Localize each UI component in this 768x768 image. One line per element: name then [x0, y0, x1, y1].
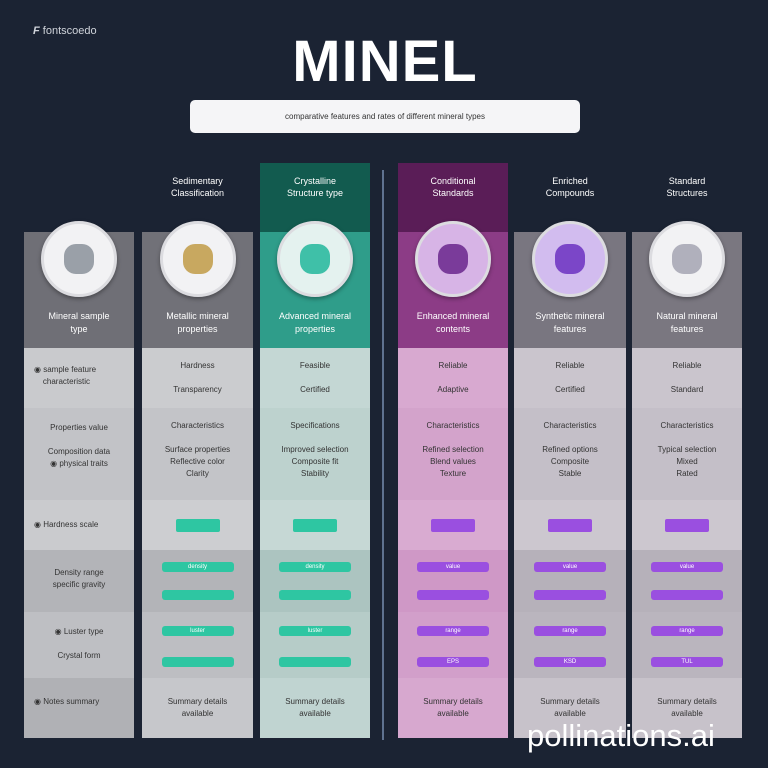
column 3: Summary details — [285, 697, 345, 706]
column 6: Natural mineral — [656, 311, 718, 321]
column 3: Feasible — [300, 361, 330, 370]
column 1: ◉ Hardness scale — [34, 520, 98, 529]
column 6: Rated — [676, 469, 698, 478]
column 2: luster — [190, 628, 205, 634]
column 6: Standard — [669, 176, 705, 186]
column 1 — [24, 221, 134, 738]
column 6: Mixed — [676, 457, 698, 466]
column 4: value — [446, 564, 460, 570]
column 6: TUL — [681, 659, 693, 665]
column 4: EPS — [447, 659, 459, 665]
column 2: density — [188, 564, 207, 570]
column 6: value — [680, 564, 694, 570]
column 3: Stability — [301, 469, 329, 478]
column 5: Summary details — [540, 697, 600, 706]
column 6: Characteristics — [661, 421, 713, 430]
watermark: pollinations.ai — [527, 718, 715, 753]
column 6: Standard — [671, 385, 703, 394]
title: MINEL — [292, 29, 478, 94]
column 4: Refined selection — [422, 445, 484, 454]
column 3: density — [305, 564, 324, 570]
column 3 — [260, 163, 370, 738]
column 5: Enriched — [552, 176, 588, 186]
column 6: features — [671, 324, 703, 334]
column 2: Surface properties — [165, 445, 230, 454]
column 6: Summary details — [657, 697, 717, 706]
column 3: luster — [308, 628, 322, 634]
column 1: type — [70, 324, 88, 334]
column 3: Certified — [300, 385, 330, 394]
column 2: properties — [177, 324, 218, 334]
column 5: Refined options — [542, 445, 598, 454]
column 1: ◉ sample feature — [34, 365, 96, 374]
column 1: ◉ physical traits — [50, 459, 108, 468]
column 5: value — [563, 564, 577, 570]
column 4: Blend values — [430, 457, 476, 466]
column 6: Typical selection — [658, 445, 716, 454]
column 5: Stable — [559, 469, 581, 478]
column 4: Standards — [432, 188, 474, 198]
column 4: available — [437, 709, 469, 718]
column 6: available — [671, 709, 703, 718]
column 5 — [514, 176, 626, 738]
column 2: Reflective color — [170, 457, 225, 466]
column 4: contents — [436, 324, 470, 334]
column 3: Composite fit — [292, 457, 338, 466]
column 2 — [142, 176, 253, 738]
column 1: Properties value — [50, 423, 108, 432]
column 1: characteristic — [43, 377, 90, 386]
column 2: Summary details — [168, 697, 227, 706]
column 2: Transparency — [173, 385, 222, 394]
column 2: Classification — [171, 188, 224, 198]
column 2: Hardness — [180, 361, 215, 370]
logo: F fontscoedo — [33, 25, 97, 37]
column 1: specific gravity — [53, 580, 105, 589]
column 1: Density range — [54, 568, 104, 577]
column 3: available — [299, 709, 331, 718]
column 3: Improved selection — [281, 445, 349, 454]
subtitle bar: comparative features and rates of different mineral types — [285, 112, 485, 121]
column 4: Summary details — [423, 697, 483, 706]
column 1: Mineral sample — [48, 311, 110, 321]
column 4: Enhanced mineral — [417, 311, 489, 321]
column 2: available — [182, 709, 213, 718]
column 3: properties — [295, 324, 335, 334]
column 4: Texture — [440, 469, 466, 478]
column 2: Sedimentary — [172, 176, 223, 186]
column 4: range — [445, 628, 461, 634]
column 5: Reliable — [556, 361, 584, 370]
column 6: Structures — [666, 188, 708, 198]
column 4: Adaptive — [437, 385, 469, 394]
divider line — [382, 170, 384, 740]
column 1: ◉ Luster type — [55, 627, 103, 636]
column 2: Metallic mineral — [166, 311, 229, 321]
column 5: Composite — [551, 457, 589, 466]
column 4: Characteristics — [427, 421, 479, 430]
column 5: Characteristics — [544, 421, 596, 430]
column 5: Certified — [555, 385, 585, 394]
column 3: Advanced mineral — [279, 311, 351, 321]
column 5: available — [554, 709, 586, 718]
column 6 — [632, 176, 742, 738]
column 3: Specifications — [290, 421, 340, 430]
column 1: Composition data — [48, 447, 110, 456]
column 2: Clarity — [186, 469, 209, 478]
column 5: range — [562, 628, 578, 634]
column 3: Structure type — [287, 188, 343, 198]
column 2: Characteristics — [171, 421, 224, 430]
column 5: KSD — [564, 659, 576, 665]
column 5: Compounds — [546, 188, 594, 198]
column 3: Crystalline — [294, 176, 336, 186]
column 4: Reliable — [439, 361, 467, 370]
column 5: features — [554, 324, 586, 334]
subtitle bar — [190, 100, 580, 133]
column 5: Synthetic mineral — [535, 311, 605, 321]
column 1: Crystal form — [57, 651, 101, 660]
column 6: Reliable — [673, 361, 701, 370]
column 4: Conditional — [430, 176, 476, 186]
column 1: ◉ Notes summary — [34, 697, 99, 706]
column 6: range — [679, 628, 695, 634]
column 4 — [398, 163, 508, 738]
